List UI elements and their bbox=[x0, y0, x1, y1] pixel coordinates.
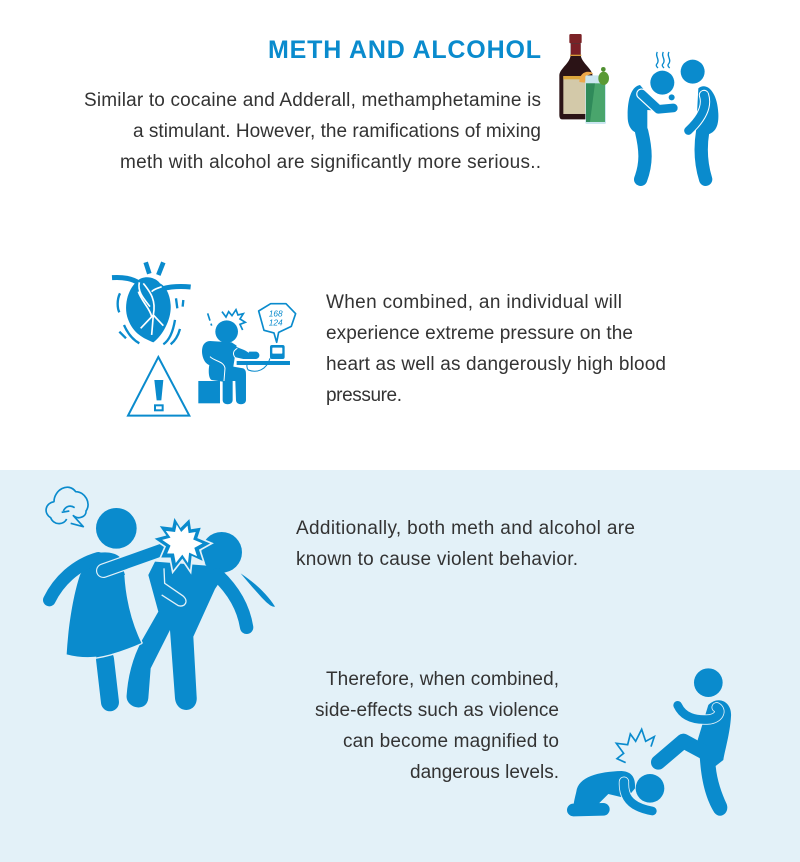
text block: magnified side-effects: Therefore, when combined, bbox=[326, 669, 559, 690]
icon: warning triangle bbox=[128, 357, 189, 416]
callout: blood pressure reading bbox=[259, 304, 296, 342]
icon: impact burst bbox=[616, 729, 654, 763]
figure: kicking person bbox=[658, 668, 731, 816]
text block: introduction: meth with alcohol are significantly more serious.. bbox=[120, 152, 541, 173]
text block: magnified side-effects: can become magnified to bbox=[343, 731, 559, 752]
callout: blood pressure reading: 124 bbox=[269, 317, 283, 327]
icon: heart, warning sign and blood pressure test bbox=[112, 262, 296, 416]
text block: magnified side-effects bbox=[315, 669, 559, 783]
text block: magnified side-effects: side-effects such as violence bbox=[315, 700, 559, 721]
text block: heart pressure: heart as well as dangerously high blood bbox=[326, 354, 666, 375]
text block: violent behaviour: Additionally, both meth and alcohol are bbox=[296, 518, 635, 539]
icon: pain burst and exclamation bbox=[222, 310, 245, 330]
panel: light blue lower background bbox=[0, 470, 800, 862]
text block: heart pressure bbox=[326, 292, 666, 406]
figure: man being hit bbox=[127, 532, 275, 710]
icon: liquor bottle and cocktail bbox=[559, 34, 609, 124]
callout: blood pressure reading: 168 bbox=[269, 308, 283, 318]
text block: introduction: Similar to cocaine and Adderall, methamphetamine is bbox=[84, 90, 541, 111]
figure: left person bbox=[628, 71, 675, 179]
figure: right person bbox=[681, 60, 718, 179]
icon: impact star bbox=[153, 516, 212, 572]
text block: introduction bbox=[84, 90, 541, 173]
text block: violent behaviour bbox=[296, 518, 635, 570]
icon: woman punching man bbox=[46, 487, 275, 710]
figure: woman bbox=[49, 508, 162, 702]
icon: angry thought cloud bbox=[46, 487, 88, 527]
icon: odour waves bbox=[656, 52, 670, 68]
figure: seated person with blood pressure cuff bbox=[198, 320, 290, 404]
text block: magnified side-effects: dangerous levels. bbox=[410, 762, 559, 783]
text block: heart pressure: pressure. bbox=[326, 385, 402, 406]
text block: heart pressure: When combined, an individual will bbox=[326, 292, 622, 313]
title: METH AND ALCOHOL bbox=[268, 36, 541, 64]
icon: person kicking kneeling person bbox=[573, 668, 731, 816]
text block: heart pressure: experience extreme pressure on the bbox=[326, 323, 633, 344]
text block: violent behaviour: known to cause violent behavior. bbox=[296, 549, 578, 570]
icon: two figures, one smelling alcohol on breath bbox=[628, 52, 718, 179]
text block: introduction: a stimulant. However, the ramifications of mixing bbox=[133, 121, 541, 142]
figure: kneeling person bbox=[573, 771, 664, 811]
icon: anatomical heart bbox=[112, 262, 191, 344]
